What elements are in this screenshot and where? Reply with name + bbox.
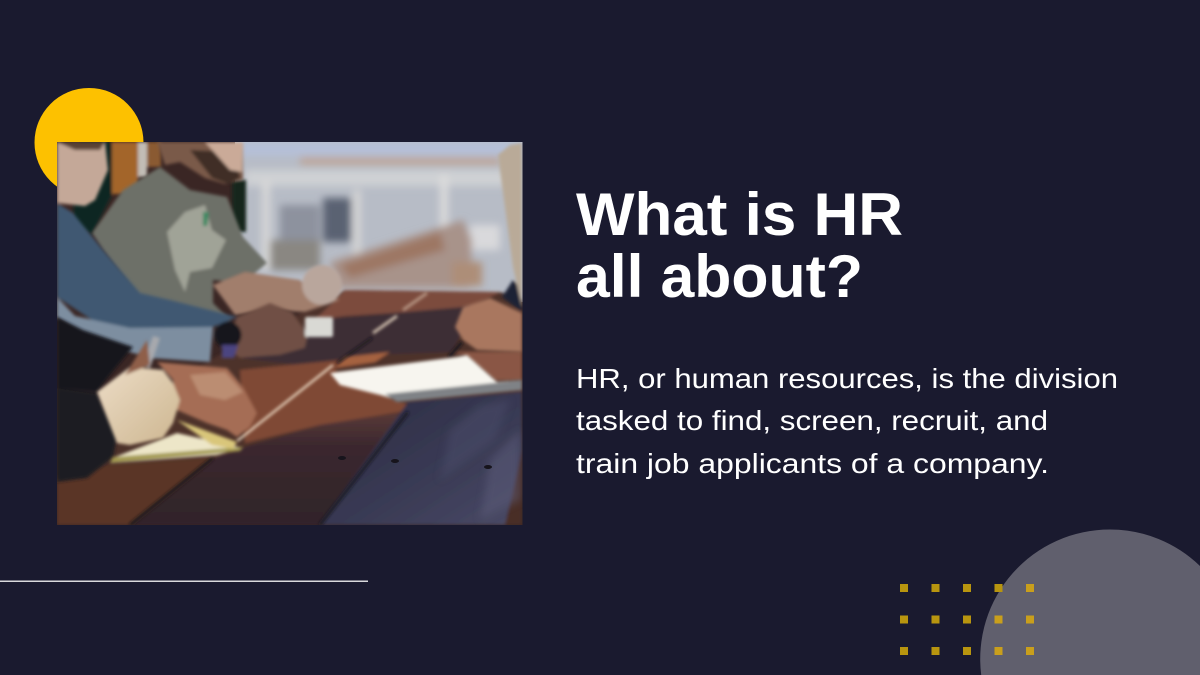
photo: man with grey sweater: [92, 142, 342, 320]
dot grid: [900, 584, 1034, 655]
photo: notepad: [110, 420, 243, 463]
photo: wood texture on right plank: [446, 404, 522, 514]
title: [576, 181, 903, 310]
photo: blurred window: [235, 142, 523, 302]
photo: light streaks on table: [237, 293, 427, 441]
photo: dark jacket: [57, 317, 133, 482]
body text: HR, or human resources, is the division: [576, 363, 1118, 394]
body text: train job applicants of a company.: [576, 448, 1049, 479]
body text: tasked to find, screen, recruit, and: [576, 405, 1048, 436]
title: all about?: [576, 243, 863, 310]
photo: writing hands: [97, 336, 257, 445]
photo: hands on the right and booklet: [455, 143, 522, 352]
body text: [576, 363, 1118, 479]
photo: open notebook: [330, 355, 522, 402]
photo: meeting at a wooden table: [57, 142, 523, 525]
photo: wall behind the men: [72, 142, 246, 235]
title: What is HR: [576, 181, 903, 248]
photo: table: [57, 290, 522, 525]
yellow circle: [34, 88, 144, 197]
photo: plank gaps and knots: [130, 338, 462, 525]
divider line: [0, 580, 368, 582]
grey circle: [980, 529, 1200, 675]
photo: man in blue sleeve: [57, 142, 333, 362]
